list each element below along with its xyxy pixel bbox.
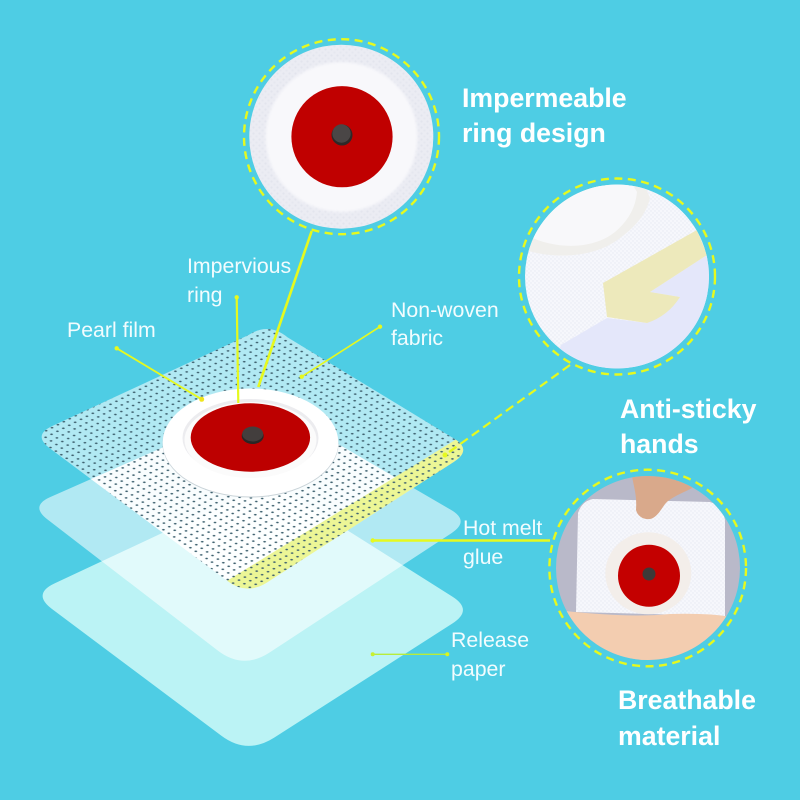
arm — [566, 611, 726, 660]
label: hot melt glue: Hot melt — [463, 516, 542, 540]
label: non-woven fabric: fabric — [391, 326, 443, 350]
label: hot melt glue: glue — [463, 545, 503, 569]
connector lines — [114, 231, 570, 656]
release liner — [560, 256, 709, 368]
layer: release paper — [43, 488, 463, 746]
line: pearl film — [114, 346, 204, 402]
layer: non-woven fabric mesh — [42, 329, 464, 589]
label: release paper: Release — [451, 628, 529, 652]
layer: hot melt glue sheet — [39, 407, 461, 661]
anti-stick strip — [227, 440, 464, 589]
label: non-woven fabric: Non-woven — [391, 298, 499, 322]
label: impervious ring: Impervious — [187, 254, 291, 278]
pearl film ring with red pad — [162, 388, 338, 498]
callout circle: anti-sticky — [518, 177, 716, 376]
line: impervious ring — [234, 295, 239, 403]
heading: impermeable ring design: Impermeable — [462, 83, 627, 113]
callout circle: breathable — [549, 470, 750, 680]
label: release paper: paper — [451, 657, 505, 681]
pale ring — [528, 184, 650, 256]
red pad — [618, 545, 680, 607]
finger — [632, 476, 692, 520]
label: impervious ring: ring — [187, 283, 223, 307]
line: non-woven fabric — [300, 324, 382, 379]
line: ring design — [258, 231, 312, 387]
callout circle: impermeable ring — [244, 39, 439, 234]
line: release paper — [371, 652, 449, 656]
label: pearl film: Pearl film — [67, 318, 156, 342]
line: hot melt glue — [370, 538, 550, 543]
yellow tape — [603, 230, 707, 323]
button — [642, 568, 656, 580]
line: anti-sticky — [442, 365, 570, 458]
heading: anti-sticky hands: hands — [620, 429, 699, 459]
white patch — [576, 499, 725, 616]
heading: anti-sticky hands: Anti-sticky — [620, 394, 756, 424]
heading: breathable material: material — [618, 721, 720, 751]
heading: impermeable ring design: ring design — [462, 118, 606, 148]
pearl ring — [605, 532, 691, 614]
heading: breathable material: Breathable — [618, 685, 756, 715]
